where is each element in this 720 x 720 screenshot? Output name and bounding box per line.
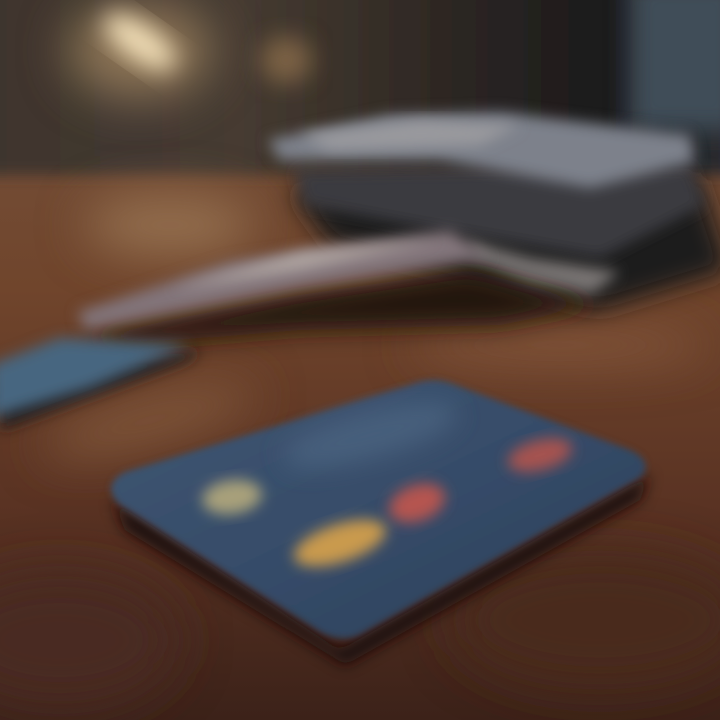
card body <box>111 380 646 638</box>
table highlight glow <box>0 195 720 710</box>
credit card <box>111 380 650 665</box>
stack of papers <box>268 112 720 310</box>
dark blue column, upper right <box>630 0 720 130</box>
blue card body <box>0 338 190 418</box>
paper sheet <box>78 230 490 330</box>
stack shadow <box>290 180 720 310</box>
stack top sheet <box>268 112 695 188</box>
card shadow <box>112 475 650 665</box>
orange pill <box>288 510 392 576</box>
stack light band <box>300 120 520 150</box>
red right spot <box>504 432 576 478</box>
background wall <box>0 0 720 175</box>
card sheen <box>277 389 463 481</box>
blue card at left edge <box>0 338 200 430</box>
fanned paper sheet <box>78 230 600 345</box>
paper highlight <box>170 240 440 290</box>
stack middle layer <box>295 165 705 258</box>
stack lower sheet <box>465 240 620 296</box>
yellow chip spot <box>200 476 264 518</box>
red spot <box>384 476 450 530</box>
blue card shadow <box>0 350 200 430</box>
window light glow <box>68 2 312 98</box>
paper shadow <box>85 270 600 345</box>
